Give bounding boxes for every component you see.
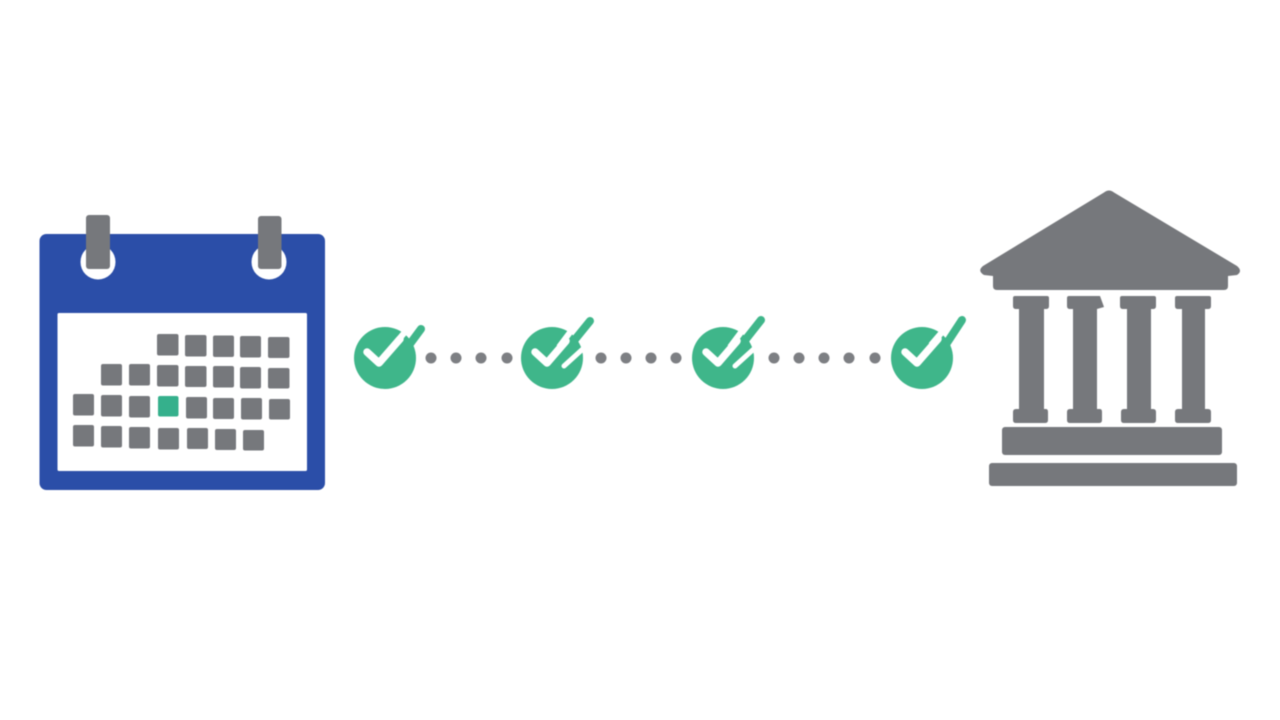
bank upper step [1002, 427, 1222, 455]
icon: calendar [40, 215, 325, 490]
bank roof [980, 190, 1240, 290]
bank column 1 [1013, 296, 1049, 423]
checkmark 3 [692, 320, 761, 389]
bank column 2 [1067, 296, 1104, 423]
connector dots 1 [426, 352, 512, 364]
connector dots 2 [596, 352, 682, 364]
bank lower step [989, 463, 1237, 486]
checkmark 4 [891, 320, 962, 389]
bank column 3 [1120, 296, 1156, 423]
calendar binder ring left [80, 215, 116, 280]
connector dots 3 [768, 352, 880, 364]
bank column 4 [1175, 296, 1211, 423]
calendar day grid [73, 334, 290, 450]
checkmark 1 [354, 327, 421, 389]
calendar page [58, 313, 307, 471]
calendar highlighted day [158, 396, 178, 416]
checkmark 2 [521, 321, 590, 389]
icon: bank building [980, 190, 1240, 486]
calendar binder ring right [252, 216, 286, 280]
